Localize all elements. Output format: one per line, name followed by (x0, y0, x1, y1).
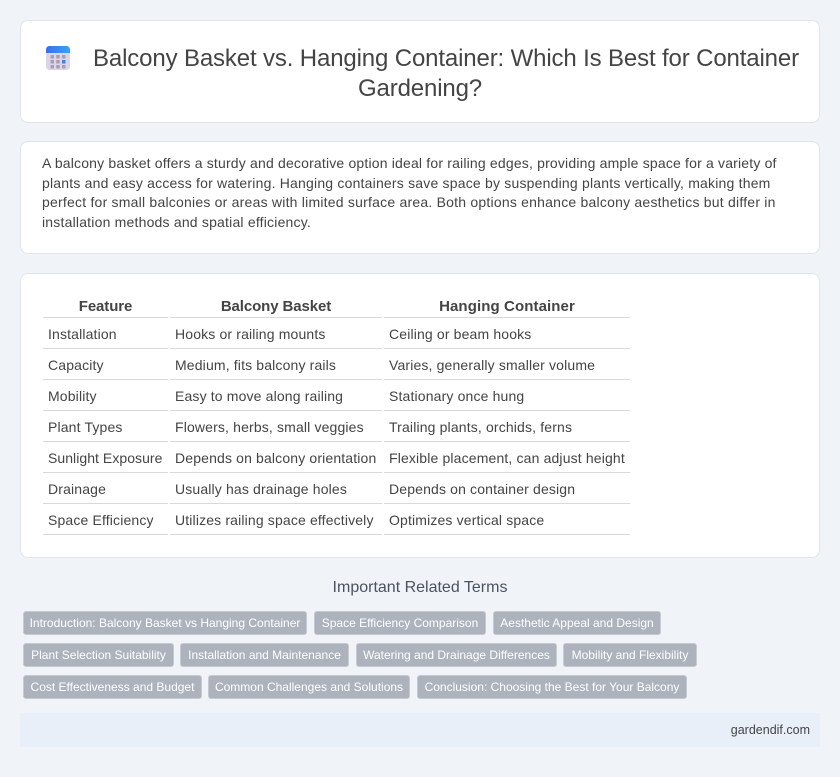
intro paragraph: A balcony basket offers a sturdy and decorative option ideal for railing edges, providing ample space for a variety of (42, 155, 777, 171)
comparison table: Hooks or railing mounts (175, 326, 326, 342)
intro paragraph (42, 155, 777, 230)
related term tags: Plant Selection Suitability (31, 648, 166, 662)
related term tags: Conclusion: Choosing the Best for Your Balcony (425, 680, 679, 694)
footer bar (20, 713, 820, 747)
comparison table: Hanging Container (439, 298, 575, 315)
comparison table: Capacity (48, 357, 104, 373)
related term tags (23, 611, 697, 699)
title (93, 45, 799, 102)
intro paragraph: plants and easy access for watering. Hanging containers save space by suspending plants vertically, making them (42, 174, 771, 190)
related term tags: Watering and Drainage Differences (363, 648, 550, 662)
comparison table: Utilizes railing space effectively (175, 512, 374, 528)
title: Balcony Basket vs. Hanging Container: Which Is Best for Container (93, 45, 799, 72)
comparison table: Mobility (48, 388, 97, 404)
related term tags: Installation and Maintenance (188, 648, 341, 662)
comparison table: Ceiling or beam hooks (389, 326, 531, 342)
comparison table: Stationary once hung (389, 388, 524, 404)
related terms heading: Important Related Terms (333, 579, 507, 596)
related term tags: Introduction: Balcony Basket vs Hanging Container (30, 616, 300, 630)
comparison table panel (20, 273, 820, 558)
comparison table (43, 298, 630, 535)
related term tags: Space Efficiency Comparison (322, 616, 478, 630)
comparison table: Sunlight Exposure (48, 450, 162, 466)
comparison table: Medium, fits balcony rails (175, 357, 336, 373)
related term tags: Cost Effectiveness and Budget (31, 680, 194, 694)
header panel (20, 20, 820, 123)
comparison table: Installation (48, 326, 117, 342)
intro paragraph: perfect for small balconies or areas with limited surface area. Both options enhance balcony aesthetics but differ in (42, 194, 776, 210)
comparison table: Easy to move along railing (175, 388, 343, 404)
title: Gardening? (358, 75, 482, 102)
comparison table: Flowers, herbs, small veggies (175, 419, 364, 435)
comparison table: Plant Types (48, 419, 123, 435)
related term tags: Aesthetic Appeal and Design (500, 616, 654, 630)
related term tags: Common Challenges and Solutions (215, 680, 403, 694)
icon: calendar (46, 46, 70, 70)
comparison table: Depends on container design (389, 481, 575, 497)
comparison table: Flexible placement, can adjust height (389, 450, 625, 466)
comparison table: Varies, generally smaller volume (389, 357, 595, 373)
comparison table: Feature (79, 298, 132, 315)
intro text panel (20, 141, 820, 254)
comparison table: Trailing plants, orchids, ferns (389, 419, 572, 435)
comparison table: Balcony Basket (221, 298, 331, 315)
footer source: gardendif.com (731, 723, 810, 737)
comparison table: Usually has drainage holes (175, 481, 347, 497)
intro paragraph: installation methods and spatial efficiency. (42, 214, 311, 230)
comparison table: Depends on balcony orientation (175, 450, 376, 466)
comparison table: Optimizes vertical space (389, 512, 544, 528)
related term tags: Mobility and Flexibility (572, 648, 688, 662)
comparison table: Space Efficiency (48, 512, 154, 528)
comparison table: Drainage (48, 481, 106, 497)
